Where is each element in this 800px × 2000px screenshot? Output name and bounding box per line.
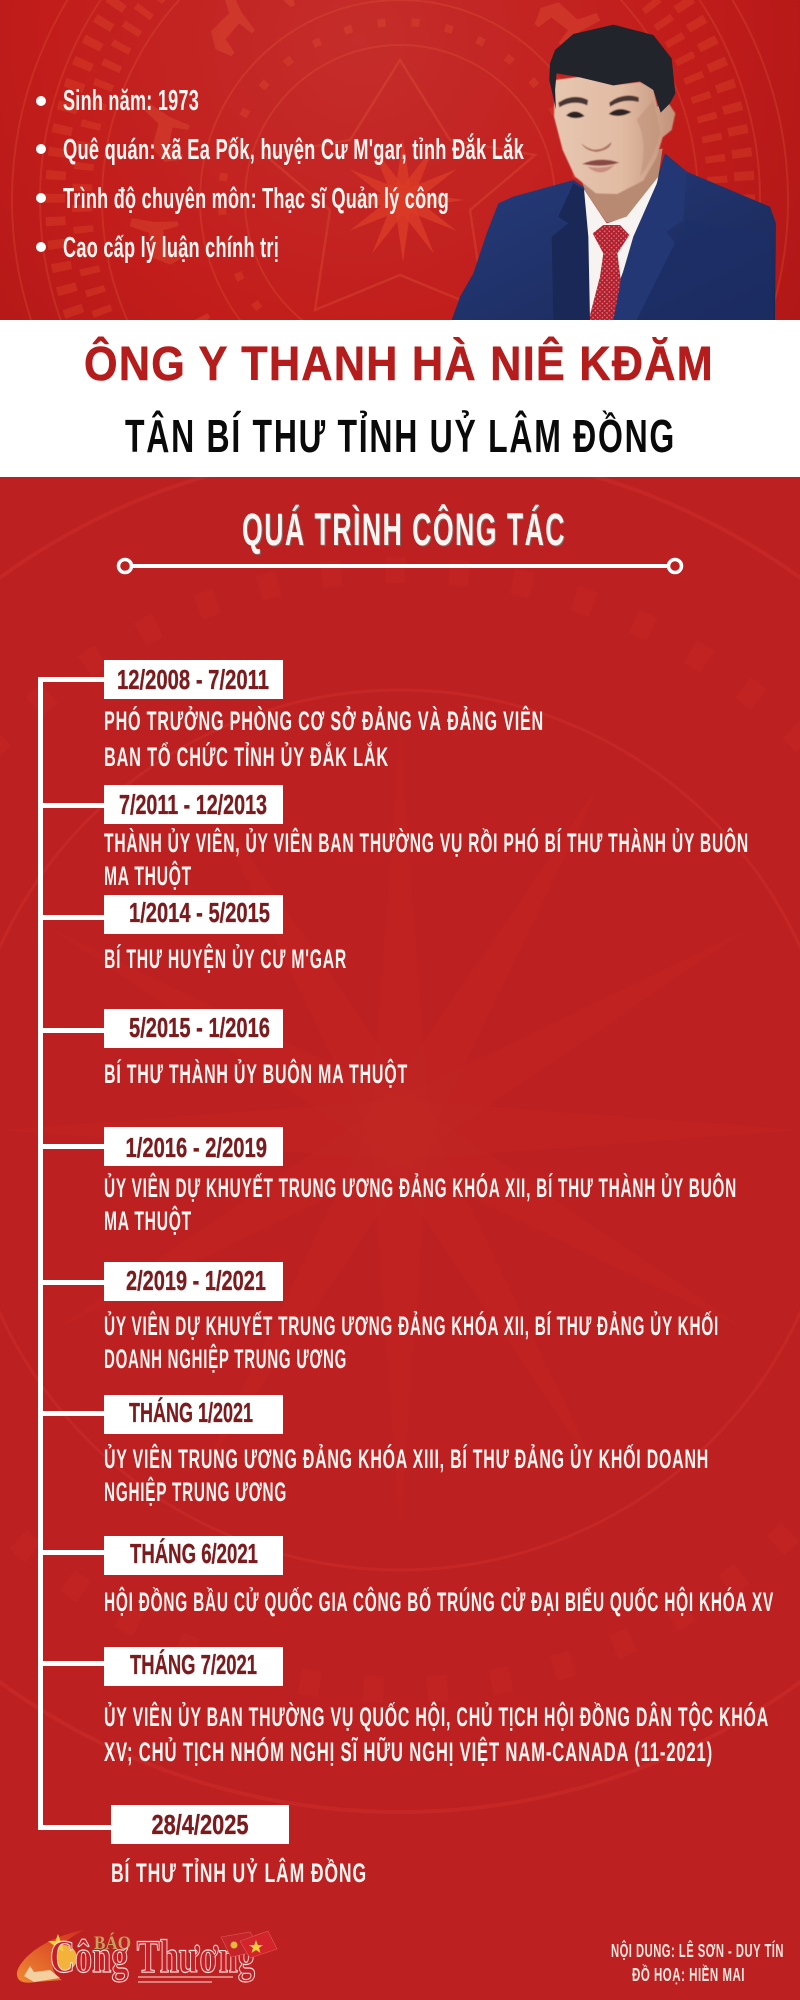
- tie: [589, 225, 629, 320]
- bullet: birth year: Sinh năm: 1973: [63, 85, 199, 117]
- entry 8: THÁNG 6/2021: [130, 1538, 258, 1569]
- hair: [549, 25, 675, 113]
- entry 5: [104, 1127, 737, 1236]
- background: bronze drum pattern: [11, 0, 789, 320]
- panel: top banner: [11, 0, 800, 320]
- entry 6: DOANH NGHIỆP TRUNG ƯƠNG: [104, 1344, 347, 1374]
- entry 7: THÁNG 1/2021: [129, 1397, 253, 1428]
- entry 7: [104, 1395, 709, 1507]
- heading: work history: QUÁ TRÌNH CÔNG TÁC: [242, 504, 566, 555]
- entry 2: [104, 785, 749, 891]
- bullet list: biography: [36, 85, 524, 264]
- bullet: political theory: Cao cấp lý luận chính trị: [63, 232, 279, 264]
- entry 3: BÍ THƯ HUYỆN ỦY CƯ M'GAR: [104, 944, 347, 974]
- entry 1: [104, 660, 544, 772]
- panel: title band: [0, 320, 800, 477]
- entry 3: [104, 895, 347, 974]
- icon: flame with star: [17, 1930, 84, 1983]
- entry 7: NGHIỆP TRUNG ƯƠNG: [104, 1477, 287, 1507]
- suit: [452, 153, 776, 320]
- entry 9: THÁNG 7/2021: [130, 1649, 257, 1680]
- entry 4: [104, 1009, 408, 1089]
- entry 6: [104, 1262, 719, 1374]
- entry 4: BÍ THƯ THÀNH ỦY BUÔN MA THUỘT: [104, 1059, 408, 1089]
- entry 3: 1/2014 - 5/2015: [129, 897, 270, 928]
- lapels: [552, 183, 590, 320]
- entry 6: 2/2019 - 1/2021: [126, 1265, 266, 1296]
- neck: [578, 148, 663, 223]
- heading rule with end rings: [118, 560, 682, 572]
- bullet: hometown: Quê quán: xã Ea Pốk, huyện Cư M'gar, tỉnh Đắk Lắk: [63, 132, 524, 166]
- panel: career timeline: [38, 504, 774, 1882]
- entry 2: MA THUỘT: [104, 861, 192, 891]
- entry 8: [104, 1536, 774, 1617]
- bullet: hometown: [36, 132, 524, 166]
- bullet: education: [36, 183, 449, 215]
- entry 10: [111, 1805, 367, 1888]
- bullet: political theory: [36, 232, 279, 264]
- bullet: education: Trình độ chuyên môn: Thạc sĩ Quản lý công: [63, 183, 449, 215]
- entry 5: 1/2016 - 2/2019: [126, 1132, 267, 1163]
- credits: [611, 1940, 784, 1985]
- icon: flags: [221, 1931, 277, 1958]
- portrait: man in navy suit and red tie: [452, 25, 776, 320]
- entry 10: BÍ THƯ TỈNH UỶ LÂM ĐỒNG: [111, 1858, 367, 1888]
- entry 2: 7/2011 - 12/2013: [119, 789, 267, 820]
- logo: Báo Công Thương: Công Thương: [50, 1931, 255, 1983]
- shirt: [584, 177, 658, 320]
- entry 9: [104, 1647, 769, 1767]
- timeline connector: [38, 677, 111, 1830]
- entry 5: MA THUỘT: [104, 1206, 192, 1236]
- entry 1: BAN TỔ CHỨC TỈNH ỦY ĐẮK LẮK: [104, 742, 389, 772]
- title: name: ÔNG Y THANH HÀ NIÊ KĐĂM: [84, 336, 714, 391]
- face: [554, 77, 675, 194]
- entry 10: 28/4/2025: [152, 1809, 248, 1840]
- background: faint drum pattern: [0, 448, 800, 1812]
- logo text: BÁO: [94, 1932, 131, 1954]
- bullet: birth year: [36, 85, 199, 117]
- entry 1: 12/2008 - 7/2011: [117, 664, 269, 695]
- entry 4: 5/2015 - 1/2016: [129, 1012, 270, 1043]
